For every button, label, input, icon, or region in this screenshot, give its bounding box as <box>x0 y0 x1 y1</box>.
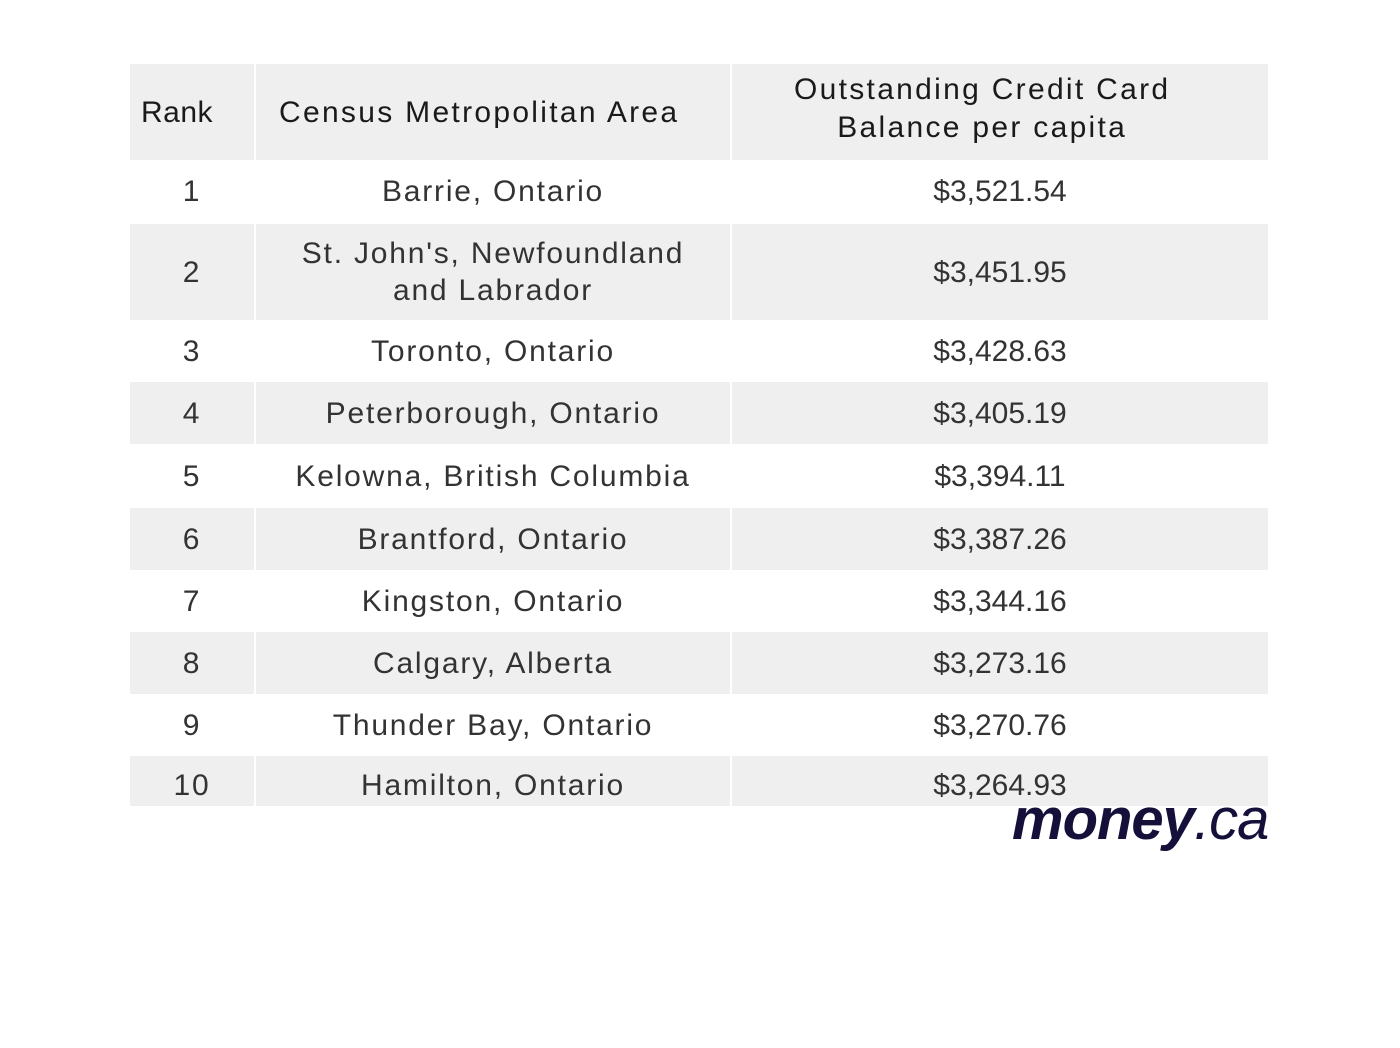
table <box>130 64 1268 806</box>
header row <box>130 64 1268 160</box>
table: $3,387.26 <box>933 522 1067 556</box>
table: 2 <box>183 256 201 288</box>
table: $3,273.16 <box>933 646 1067 680</box>
row 8 <box>130 632 1268 694</box>
table: 5 <box>183 460 201 492</box>
table: $3,451.95 <box>933 256 1067 288</box>
table: $3,270.76 <box>933 708 1067 742</box>
table: $3,405.19 <box>933 396 1067 430</box>
row 5 <box>183 460 1066 492</box>
table: Thunder Bay, Ontario <box>333 708 653 742</box>
table: $3,264.93 <box>933 769 1067 802</box>
row 7 <box>183 584 1067 618</box>
table: Brantford, Ontario <box>358 522 628 556</box>
table: Rank <box>141 96 213 128</box>
row 3 <box>183 334 1067 368</box>
row 2 <box>130 224 1268 320</box>
table: Peterborough, Ontario <box>326 396 660 430</box>
table: 3 <box>183 334 201 368</box>
row 9 <box>183 708 1067 742</box>
table: $3,428.63 <box>933 334 1067 368</box>
table: 10 <box>174 769 210 802</box>
table: Calgary, Alberta <box>373 646 613 680</box>
table: Census Metropolitan Area <box>279 96 679 128</box>
row 6 <box>130 508 1268 570</box>
table: $3,394.11 <box>934 460 1066 492</box>
table: 9 <box>183 708 201 742</box>
row 4 <box>130 382 1268 444</box>
table: Hamilton, Ontario <box>361 769 625 802</box>
row 1 <box>183 174 1067 208</box>
table: and Labrador <box>393 274 593 307</box>
table: Toronto, Ontario <box>371 334 615 368</box>
table: $3,344.16 <box>933 584 1067 618</box>
logo: money.ca: money.ca <box>1012 787 1268 852</box>
table: 4 <box>183 396 201 430</box>
table: Outstanding Credit Card <box>794 73 1170 106</box>
table: 8 <box>183 646 201 680</box>
table: Balance per capita <box>837 111 1127 144</box>
table: Kelowna, British Columbia <box>295 460 691 492</box>
table: Kingston, Ontario <box>362 584 624 618</box>
table: $3,521.54 <box>933 174 1067 208</box>
row 10 <box>130 756 1268 806</box>
table: Barrie, Ontario <box>382 174 604 208</box>
table: 1 <box>183 174 201 208</box>
table: 7 <box>183 584 201 618</box>
table: 6 <box>183 522 201 556</box>
table: St. John's, Newfoundland <box>302 237 684 270</box>
